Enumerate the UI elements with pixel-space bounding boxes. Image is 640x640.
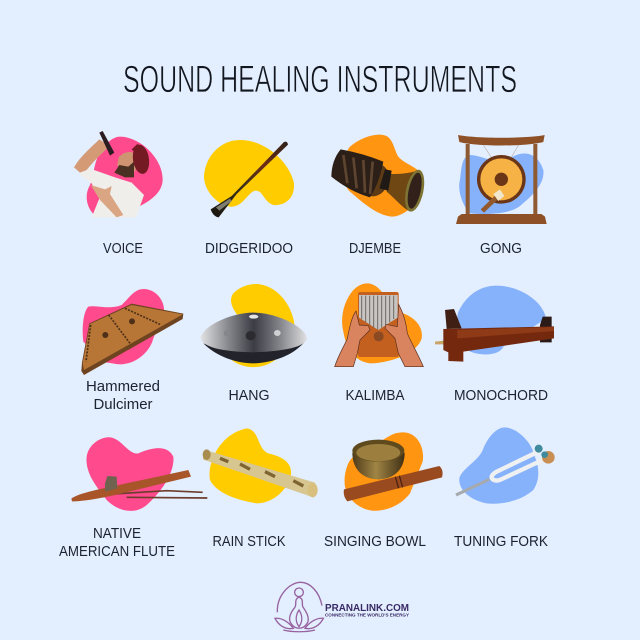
- instrument: monochord: [435, 286, 554, 362]
- label: voice: VOICE: [103, 241, 143, 257]
- label: hammered dulcimer: [86, 379, 160, 413]
- label: rain stick: RAIN STICK: [212, 534, 286, 550]
- label: hammered dulcimer: Dulcimer: [94, 397, 153, 413]
- instrument: gong: [456, 135, 547, 224]
- instrument: native american flute: [71, 437, 207, 511]
- label: native american flute: NATIVE: [93, 526, 141, 542]
- instrument: rain stick: [203, 428, 318, 503]
- label: native american flute: [59, 526, 175, 560]
- label: native american flute: AMERICAN FLUTE: [59, 544, 175, 560]
- label: didgeridoo: DIDGERIDOO: [205, 241, 293, 257]
- label: tuning fork: TUNING FORK: [454, 534, 548, 550]
- instrument: tuning fork: [456, 427, 555, 504]
- label: singing bowl: SINGING BOWL: [324, 534, 426, 550]
- instrument: singing bowl: [344, 432, 443, 511]
- instrument: djembe: [331, 135, 428, 217]
- label: kalimba: KALIMBA: [346, 388, 405, 404]
- logo: pranalink: [275, 582, 409, 632]
- logo name: PRANALINK.COM: [325, 602, 409, 614]
- instrument: kalimba: [335, 283, 423, 367]
- instrument: hammered dulcimer: [81, 289, 183, 375]
- instrument: voice: [74, 131, 163, 217]
- logo tagline: CONNECTING THE WORLD'S ENERGY: [325, 612, 409, 618]
- label: hang: HANG: [228, 388, 270, 404]
- instrument: didgeridoo: [204, 140, 294, 217]
- instrument: hang: [201, 284, 307, 367]
- label: djembe: DJEMBE: [349, 241, 401, 257]
- label: monochord: MONOCHORD: [454, 388, 548, 404]
- icon: meditating figure with lotus: [275, 582, 323, 632]
- label: hammered dulcimer: Hammered: [86, 379, 160, 395]
- label: gong: GONG: [480, 241, 522, 257]
